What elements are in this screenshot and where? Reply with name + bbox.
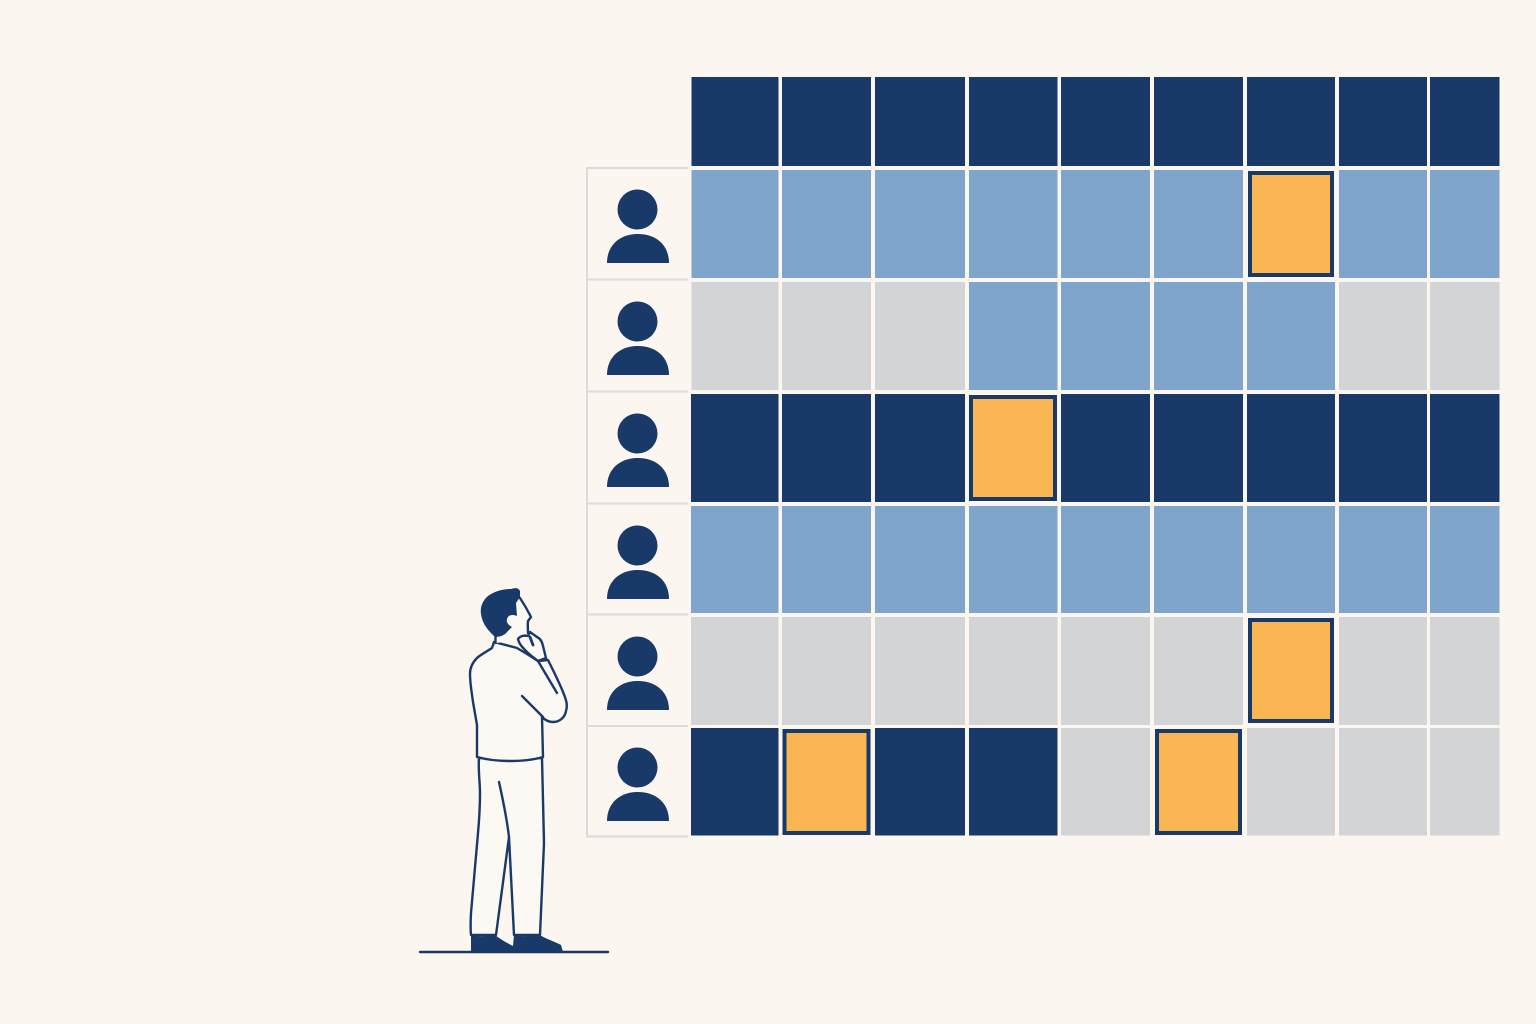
face skin area	[493, 597, 531, 643]
label column grid lines	[587, 168, 688, 836]
matrix row 1: light blue with one highlighted cell	[692, 170, 1500, 278]
highlighted cell row 1 column 7	[1250, 173, 1332, 275]
row label column with person icons	[587, 168, 688, 836]
highlighted cell row 5 column 7	[1250, 620, 1332, 721]
icon: person row 5	[607, 636, 669, 710]
trousers	[471, 758, 544, 935]
icon: person row 4	[607, 526, 669, 599]
header row of navy cells	[692, 77, 1500, 166]
hand on chin	[518, 632, 546, 661]
matrix row 3: navy with one highlighted cell	[691, 394, 1500, 502]
icon: person row 3	[607, 414, 669, 487]
icon: person row 6	[607, 748, 669, 821]
hair	[481, 588, 520, 637]
finger	[530, 637, 533, 645]
shoes	[471, 935, 563, 952]
neck line	[494, 637, 497, 643]
icon: person row 2	[607, 302, 669, 375]
jacket body and arm	[470, 642, 567, 761]
inner leg line	[499, 782, 509, 837]
sleeve fold lines	[522, 661, 557, 717]
highlighted cell row 6 column 2	[784, 731, 868, 833]
highlighted cell row 3 column 4	[971, 397, 1055, 499]
figure: thinking man looking up at the matrix	[420, 588, 608, 952]
icon: person row 1	[607, 190, 669, 263]
matrix row 6: navy and grey with two highlighted cells	[691, 728, 1500, 836]
ground line	[420, 951, 608, 953]
matrix row 2: grey and light blue	[692, 282, 1500, 390]
matrix row 5: grey with one highlighted cell	[691, 617, 1500, 725]
face profile line	[520, 598, 531, 633]
matrix row 4: light blue	[691, 506, 1500, 613]
highlighted cell row 6 column 6	[1157, 731, 1240, 833]
